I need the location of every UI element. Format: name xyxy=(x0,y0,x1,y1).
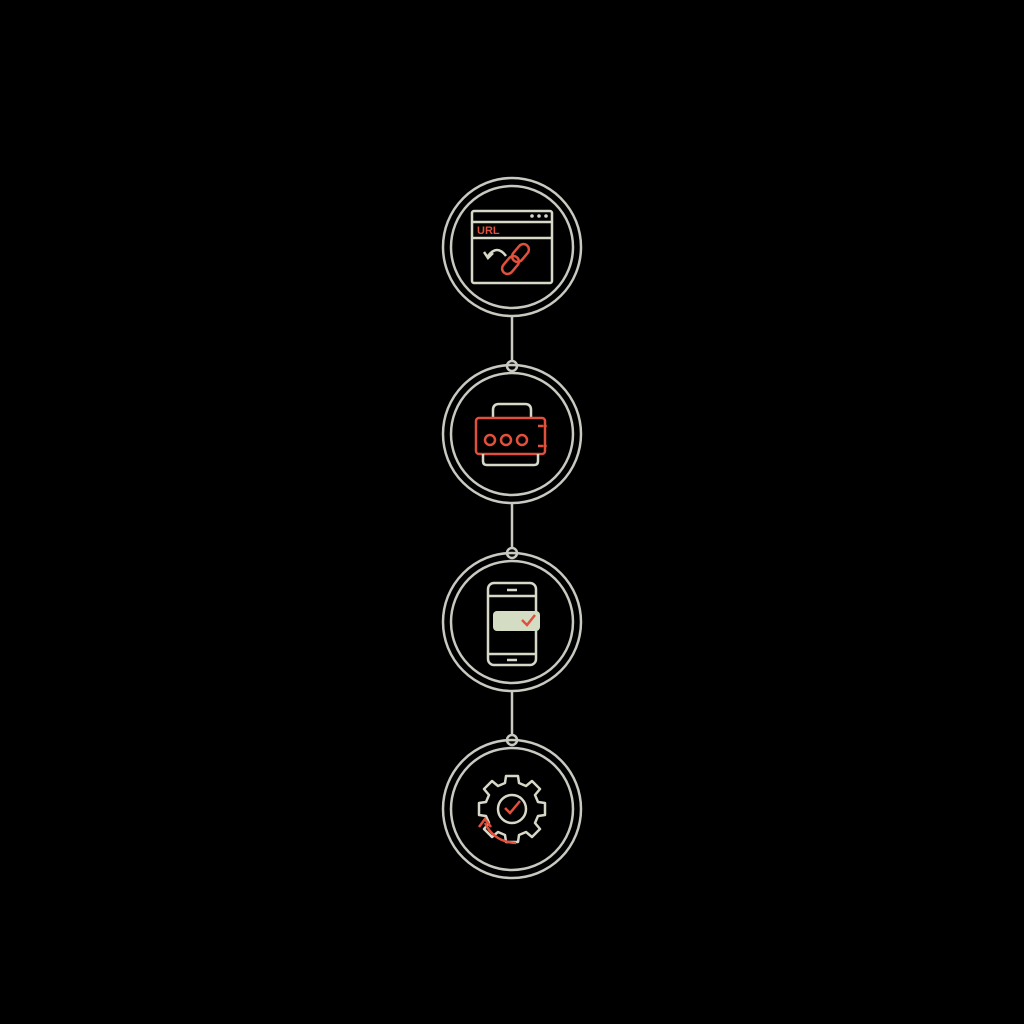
icon: password device xyxy=(476,404,547,465)
icon: gear sync xyxy=(479,776,545,843)
icon: phone with check xyxy=(488,583,540,665)
step 1: URL redirect xyxy=(443,178,581,316)
step 3: phone verification xyxy=(443,553,581,691)
step 2: device with password xyxy=(443,365,581,503)
connectors xyxy=(507,316,517,745)
step 4: gear with check xyxy=(443,740,581,878)
icon: browser with link: URL xyxy=(477,225,500,237)
